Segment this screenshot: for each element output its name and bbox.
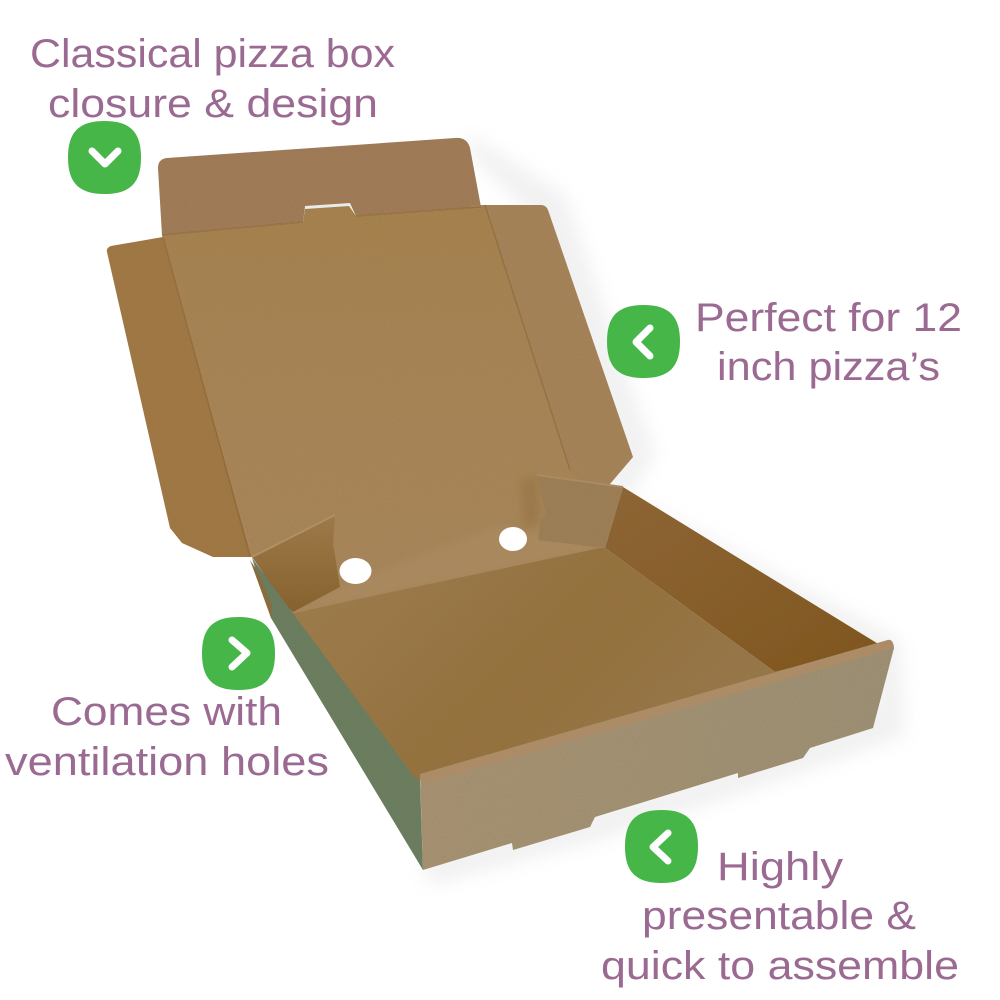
heading: perfect for 12 inch pizzas	[695, 296, 962, 389]
lid left side flap	[107, 237, 252, 557]
heading: classical pizza box closure and design: Classical pizza box	[30, 32, 395, 76]
heading: highly presentable and quick to assemble	[601, 845, 959, 988]
heading: classical pizza box closure and design	[30, 32, 395, 126]
icon: chevron left	[607, 305, 680, 378]
lid main panel	[162, 205, 605, 613]
front wall	[420, 640, 894, 870]
lid right side flap	[470, 205, 633, 500]
heading: highly presentable and quick to assemble: presentable &	[642, 894, 916, 938]
soft shadows behind box	[420, 135, 905, 885]
callout: presentable and quick	[601, 810, 959, 988]
heading: classical pizza box closure and design: closure & design	[48, 82, 378, 126]
ventilation hole left	[340, 558, 372, 584]
icon: chevron down	[68, 121, 141, 194]
left outer wall	[252, 558, 423, 870]
icon: chevron right	[202, 617, 275, 690]
heading: comes with ventilation holes: ventilation holes	[5, 740, 329, 784]
left tuck flap	[252, 515, 340, 612]
lid crease lines	[162, 205, 570, 557]
lid lower fold band	[292, 525, 605, 613]
lid closure flap	[158, 138, 481, 235]
box floor	[292, 548, 885, 780]
left tuck flap edge	[252, 515, 335, 557]
ventilation hole right	[499, 527, 527, 551]
callout: ventilation holes	[5, 617, 329, 784]
heading: comes with ventilation holes: Comes with	[51, 690, 282, 734]
callout: perfect for 12 inch	[607, 296, 962, 389]
heading: perfect for 12 inch pizzas: Perfect for 12	[695, 296, 962, 340]
right inner wall	[605, 487, 880, 672]
heading: comes with ventilation holes	[5, 690, 329, 784]
right tuck flap	[537, 475, 623, 548]
callout: closure and design	[30, 32, 395, 194]
heading: highly presentable and quick to assemble: quick to assemble	[601, 944, 959, 988]
pizza box illustration	[107, 138, 894, 870]
lid notch highlight	[305, 203, 355, 214]
front wall rim	[420, 640, 894, 784]
icon: chevron left	[625, 810, 698, 883]
left outer wall brown sliver	[250, 560, 272, 618]
right tuck flap edge	[537, 475, 623, 487]
heading: highly presentable and quick to assemble: Highly	[717, 845, 843, 889]
heading: perfect for 12 inch pizzas: inch pizza’s	[717, 345, 940, 389]
shade beside right tuck flap	[520, 476, 540, 530]
